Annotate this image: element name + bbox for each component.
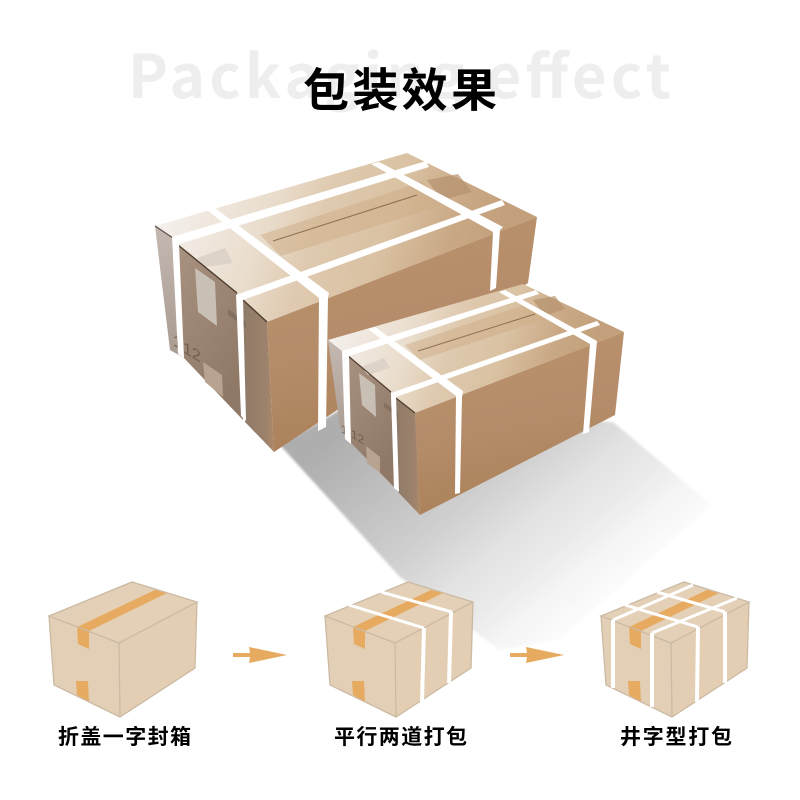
small carton end face xyxy=(328,340,351,443)
large carton tape and seam xyxy=(260,182,446,256)
arrow 2 xyxy=(510,647,564,663)
large strapped carton xyxy=(155,153,537,452)
large strapped carton: 1 xyxy=(173,330,182,354)
small carton front face xyxy=(415,332,624,515)
small strapped carton: 12 xyxy=(351,426,364,448)
large carton top face xyxy=(155,153,537,322)
step 2 box: two parallel straps xyxy=(325,582,473,717)
step 2 label: 平行两道打包 xyxy=(334,721,467,751)
title: 包装效果 xyxy=(303,54,497,120)
large carton front face xyxy=(267,217,537,452)
floor shadow xyxy=(280,395,745,650)
large strapped carton: 12 xyxy=(183,337,201,366)
arrow 1 xyxy=(233,647,287,663)
step 3 box: cross straps xyxy=(601,582,749,717)
step 1 label: 折盖一字封箱 xyxy=(58,721,191,751)
large carton white straps xyxy=(172,161,505,431)
background english title: Packaging effect xyxy=(128,29,671,116)
large carton dark flap xyxy=(243,300,274,452)
small strapped carton xyxy=(328,284,624,515)
small strapped carton: 1 xyxy=(341,421,348,439)
step 1 box: folded flap single tape xyxy=(49,582,197,717)
small carton dark flap xyxy=(396,398,420,515)
small carton shipping labels xyxy=(359,373,376,417)
step 3 label: 井字型打包 xyxy=(620,721,732,751)
large carton shipping labels xyxy=(195,268,217,326)
small carton white straps xyxy=(342,290,600,494)
small carton tape and seam xyxy=(405,303,548,360)
large carton end face xyxy=(155,226,184,358)
small carton top face xyxy=(328,284,624,413)
